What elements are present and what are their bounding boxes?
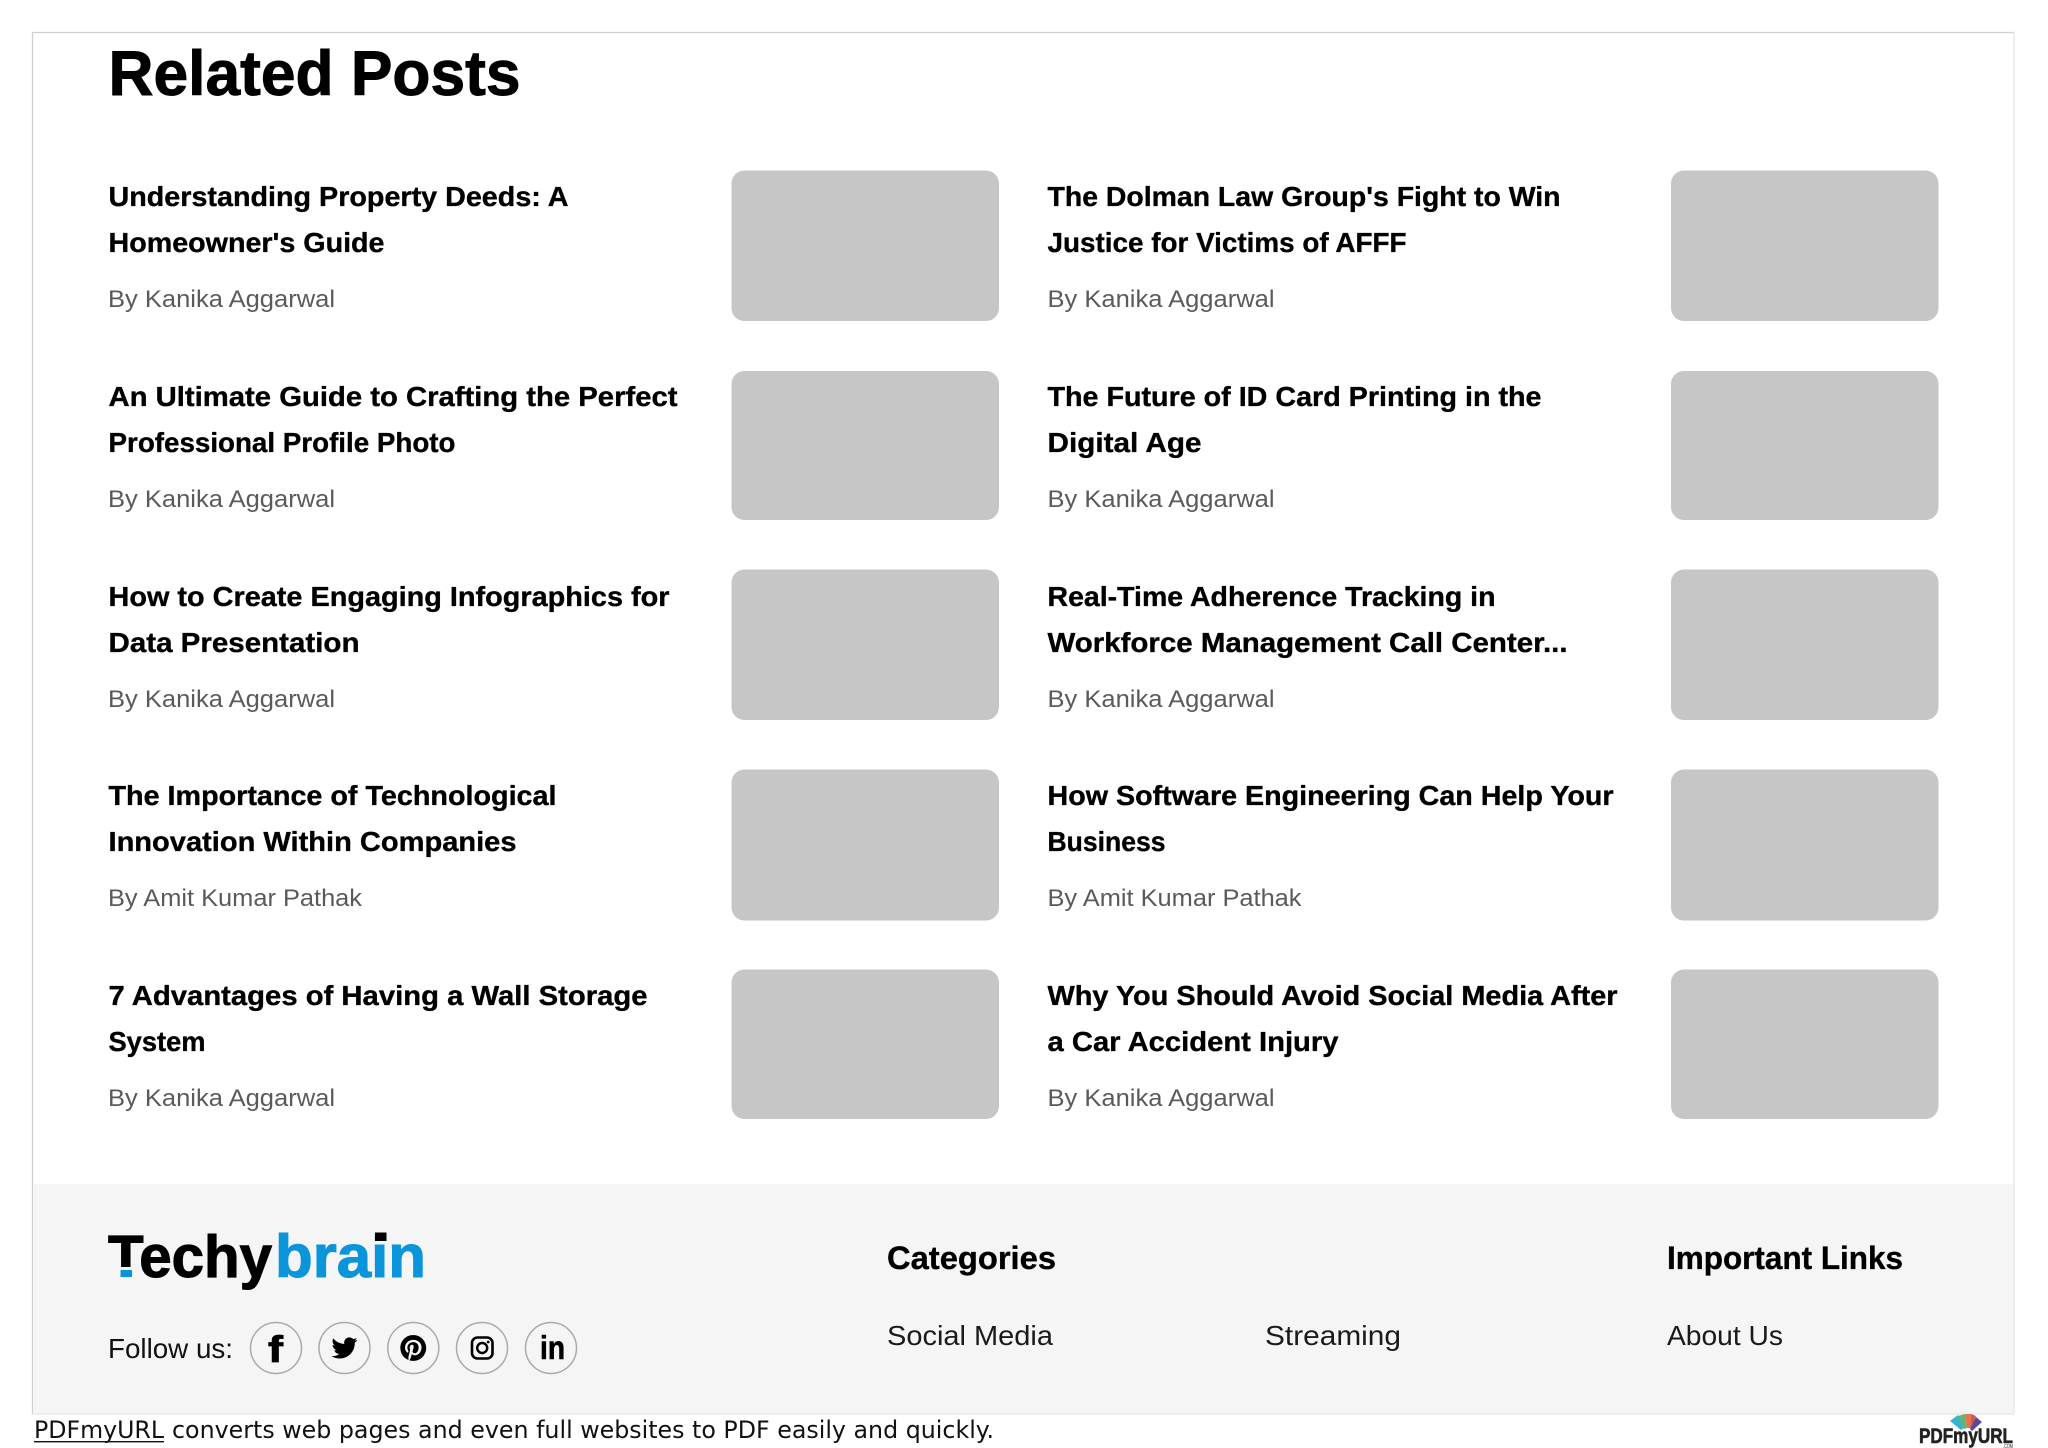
post: Understanding Property Deeds [108,170,999,321]
post: Professional Profile Photo: Professional Profile Photo [108,427,456,458]
post: Technological Innovation [108,770,999,920]
post: Social Media After Accident: a Car Accident Injury [1048,1026,1339,1057]
post: Adherence Tracking: Workforce Management Call Center... [1048,627,1568,658]
post: Wall Storage System: By Kanika Aggarwal [108,1085,335,1112]
post: Understanding Property Deeds: Homeowner's Guide [108,227,384,258]
post: Professional Profile Photo: An Ultimate Guide to Crafting the Perfect [108,381,678,412]
post: Adherence Tracking [1048,570,1938,720]
post: Dolman Law Group: The Dolman Law Group's Fight to Win [1048,181,1560,212]
post: Software Engineering: By Amit Kumar Pathak [1048,885,1303,912]
post: Social Media After Accident: By Kanika Aggarwal [1048,1085,1274,1112]
icon: facebook: f [268,1329,284,1370]
post: Engaging Infographics: By Kanika Aggarwal [108,686,335,713]
post: Software Engineering: How Software Engineering Can Help Your [1048,780,1614,811]
post: Professional Profile Photo [108,371,999,520]
post: Engaging Infographics [108,570,999,720]
logo: PDFmyURL: PDFmyURL [1919,1425,2013,1448]
logo: Techybrain [108,1223,426,1290]
banner text: PDFmyURL notice: PDFmyURL [34,1416,165,1444]
logo: Techybrain: Techy [108,1224,272,1290]
icon: pinterest [388,1322,439,1374]
post: ID Card Printing: By Kanika Aggarwal [1048,486,1274,513]
post: Engaging Infographics: How to Create Engaging Infographics for [108,581,670,612]
logo: PDFmyURL [1919,1414,2013,1448]
post: Understanding Property Deeds: Understanding Property Deeds: A [108,181,568,212]
heading: Important Links: Important Links [1667,1240,1903,1276]
post: Wall Storage System [108,970,999,1119]
icon: twitter [319,1322,370,1374]
post: Dolman Law Group: By Kanika Aggarwal [1048,286,1274,313]
post: Understanding Property Deeds: By Kanika Aggarwal [108,286,335,313]
link: About Us: About Us [1667,1320,1783,1351]
post: Technological Innovation: The Importance of Technological [108,780,556,811]
post: Adherence Tracking: Real-Time Adherence Tracking in [1048,581,1496,612]
icon: facebook [250,1322,302,1374]
logo: Techybrain: brain [275,1223,426,1290]
banner text: PDFmyURL notice: converts web pages and even full websites to PDF easily and quickly. [172,1416,994,1444]
post: Engaging Infographics: Data Presentation [108,627,360,658]
heading: Categories: Categories [887,1240,1056,1276]
post: ID Card Printing: Digital Age [1048,427,1202,458]
post: ID Card Printing [1048,371,1938,520]
post: Social Media After Accident [1048,970,1938,1119]
link: Social Media: Social Media [887,1320,1053,1351]
post: Wall Storage System: 7 Advantages of Having a Wall Storage [108,980,648,1011]
link: Streaming: Streaming [1265,1320,1401,1351]
post: Dolman Law Group: Justice for Victims of AFFF [1048,227,1406,258]
icon: instagram [456,1322,508,1374]
post: ID Card Printing: The Future of ID Card Printing in the [1048,381,1542,412]
post: Software Engineering [1048,770,1938,920]
panel: related posts left column [108,170,999,1119]
icon: linkedin [526,1322,576,1374]
post: Software Engineering: Business [1048,826,1166,857]
heading: Related Posts: Related Posts [108,39,520,109]
panel: related posts right column [1048,170,1938,1119]
post: Social Media After Accident: Why You Should Avoid Social Media After [1048,980,1618,1011]
post: Technological Innovation: Innovation Within Companies [108,826,516,857]
icon: linkedin: in [540,1329,565,1366]
post: Technological Innovation: By Amit Kumar Pathak [108,885,363,912]
panel: footer [33,1184,2014,1414]
text: Follow us: Follow us: [108,1333,233,1364]
post: Wall Storage System: System [108,1026,206,1057]
post: Dolman Law Group [1048,170,1938,321]
post: Adherence Tracking: By Kanika Aggarwal [1048,686,1274,713]
post: Professional Profile Photo: By Kanika Aggarwal [108,486,335,513]
